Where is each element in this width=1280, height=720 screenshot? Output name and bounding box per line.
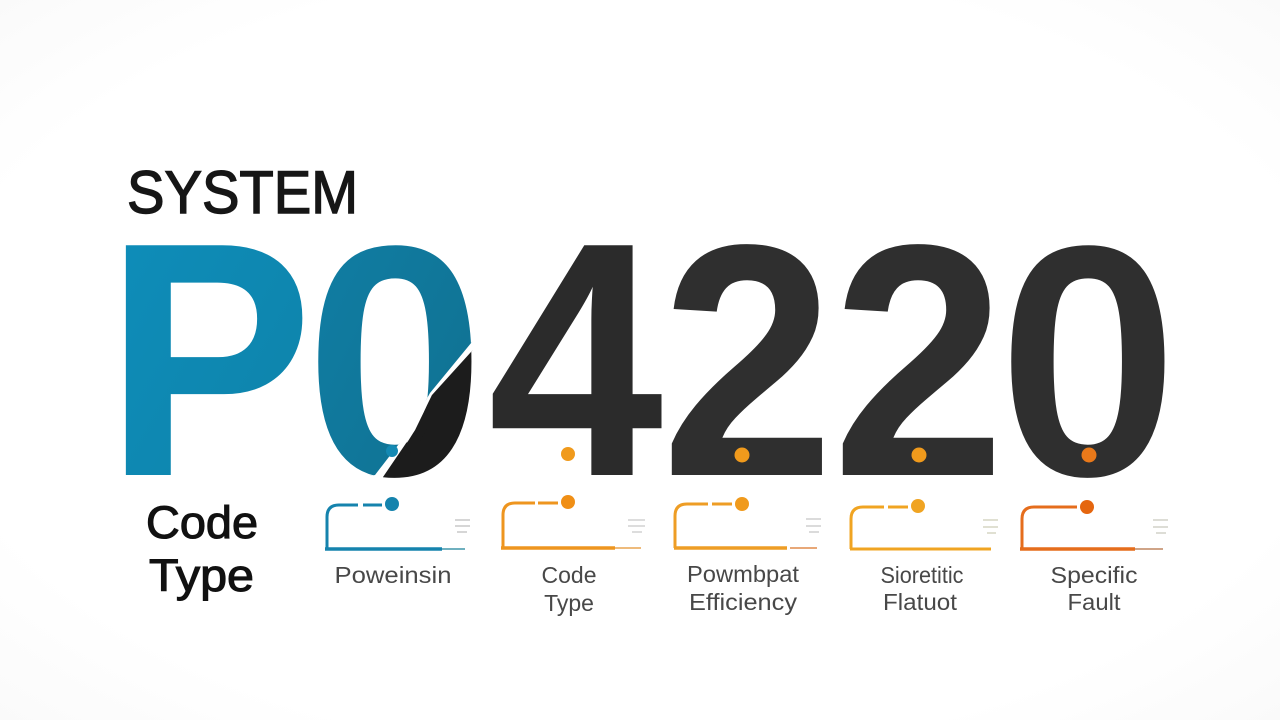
- marker dots under the digits: [386, 445, 1096, 462]
- label: Code Type: Code: [146, 497, 258, 548]
- digit 4: 4: [488, 173, 665, 546]
- label: Sioretitic: [880, 562, 964, 588]
- code: P04220: [126, 244, 1164, 478]
- panel: Powertrain: [325, 497, 470, 588]
- letter P: P: [105, 174, 313, 546]
- label: Powmbpat: [687, 561, 800, 587]
- label: Specific: [1050, 562, 1138, 588]
- first zero, dark part: [383, 350, 472, 478]
- panel: Specific Fault: Fault: [1068, 589, 1121, 615]
- panel: Specific Feature: Flatuot: [883, 589, 958, 615]
- digit 2: 2: [661, 177, 834, 546]
- panel: Specific Feature: [850, 499, 998, 615]
- digit 0: 0: [997, 175, 1179, 546]
- connector icon: [674, 497, 821, 548]
- first zero, blue part: 0: [304, 175, 486, 546]
- connector icon: [850, 499, 998, 549]
- panel: Code Type: [501, 495, 645, 616]
- panel: Code Type: Type: [544, 590, 594, 616]
- label: Poweinsin: [334, 562, 452, 588]
- digit 2: 2: [832, 177, 1005, 546]
- panel: Powertrain Efficiency: Efficiency: [689, 589, 798, 615]
- connector icon: [1020, 500, 1168, 549]
- label: Code Type: Type: [149, 550, 254, 601]
- connector icon: [325, 497, 470, 549]
- label: Code: [542, 562, 596, 588]
- panel: Specific Fault: [1020, 500, 1168, 615]
- label: Code Type: [146, 497, 258, 601]
- connector icon: [501, 495, 645, 548]
- panel: Powertrain Efficiency: [674, 497, 821, 615]
- heading: SYSTEM: SYSTEM: [127, 159, 358, 226]
- first zero, dark part: 0: [304, 175, 486, 546]
